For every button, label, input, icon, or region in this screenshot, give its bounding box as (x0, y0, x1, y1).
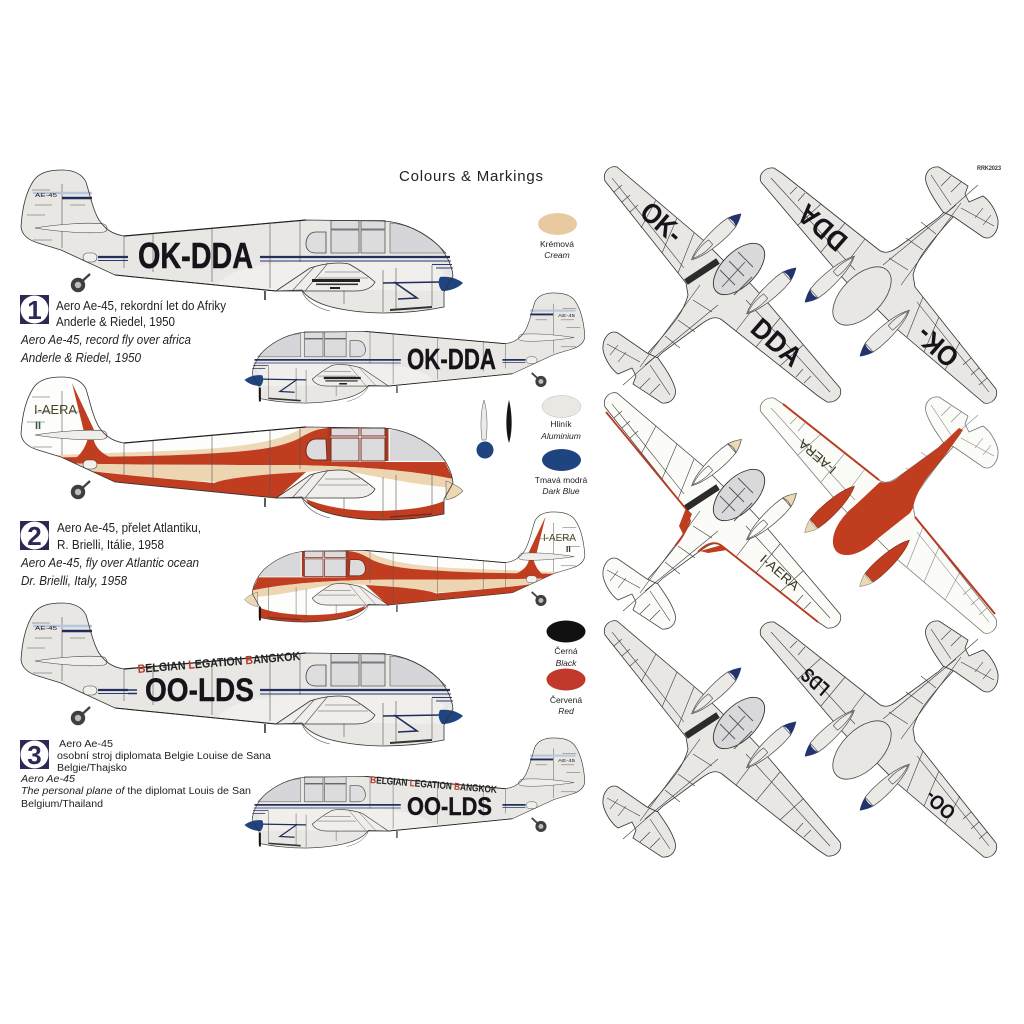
swatch: aluminium (540, 396, 581, 441)
title: Colours & Markings (399, 168, 543, 185)
swatch: cream (538, 213, 577, 260)
caption: scheme 3: Aero Ae-45 (59, 739, 113, 750)
badge 3 (20, 740, 49, 770)
caption: scheme 2: R. Brielli, Itálie, 1958 (57, 538, 164, 552)
caption: scheme 1: Aero Ae-45, record fly over africa (20, 333, 191, 347)
top view: scheme 1 upper surface (603, 167, 841, 403)
caption: scheme 2: Aero Ae-45, přelet Atlantiku, (57, 521, 201, 535)
side view: scheme 1 right profile: OK-DDA (407, 344, 496, 376)
top view: scheme 1 upper surface: DDA (745, 312, 808, 373)
top view: scheme 3 under surface (760, 621, 998, 857)
side view: scheme 2 right profile: II (566, 544, 571, 554)
side view: scheme 3 left profile: AE-45 (35, 626, 57, 632)
caption: scheme 2 (20, 521, 201, 588)
side view: scheme 3 right profile: AE-45 (558, 758, 576, 763)
caption: scheme 3: Aero Ae-45 (20, 774, 75, 785)
side view: scheme 3 right profile: OO-LDS (407, 793, 492, 821)
top view: scheme 2 under surface: I-AERA (795, 436, 839, 477)
badge 2 (20, 521, 49, 551)
copyright mark: RRK2023 (977, 166, 1002, 172)
icon: propeller dark (506, 400, 512, 443)
caption: scheme 3: Belgium/Thailand (21, 799, 103, 810)
swatch: dark blue: Tmavá modrá (535, 475, 587, 485)
swatch: red: Červená (550, 695, 582, 705)
swatch: cream: Cream (544, 250, 570, 260)
swatch: cream: Krémová (540, 239, 574, 249)
top view: scheme 1 under surface: OK- (910, 320, 965, 373)
swatch: aluminium: Aluminium (540, 431, 581, 441)
caption: scheme 3: Belgie/Thajsko (57, 763, 127, 774)
side view: scheme 3 left profile (21, 603, 463, 746)
swatch: red: Red (558, 706, 574, 716)
swatch: red (546, 668, 586, 716)
caption: scheme 3: The personal plane of the diplomat Louis de San (21, 786, 251, 797)
swatch: black: Black (556, 658, 577, 668)
badge 1 (20, 295, 49, 325)
caption: scheme 1: Anderle & Riedel, 1950 (56, 315, 175, 329)
caption: scheme 1: Aero Ae-45, rekordní let do Afriky (56, 299, 227, 313)
side view: scheme 2 right profile: I-AERA (543, 532, 576, 544)
side view: scheme 1 left profile: AE-45 (35, 193, 57, 199)
swatch: black: Černá (554, 646, 578, 656)
top view: scheme 2 upper surface: I-AERA (757, 551, 803, 594)
swatch: aluminium: Hliník (550, 419, 572, 429)
side view: scheme 3 right profile: BELGIAN LEGATION BANGKOK (370, 775, 498, 796)
top view: scheme 3 under surface: OO- (921, 785, 960, 823)
swatch: black (546, 620, 586, 668)
caption: scheme 2: Dr. Brielli, Italy, 1958 (21, 574, 127, 588)
side view: scheme 1 left profile (21, 170, 463, 313)
side view: scheme 1 right profile: AE-45 (558, 313, 576, 318)
top view: scheme 1 under surface: DDA (791, 198, 853, 257)
top view: scheme 3 upper surface (603, 621, 841, 857)
side view: scheme 2 right profile (244, 512, 585, 623)
side view: scheme 1 left profile: OK-DDA (138, 235, 253, 276)
side view: scheme 3 left profile: BELGIAN LEGATION BANGKOK (137, 649, 301, 676)
badge 2: 2 (27, 521, 42, 551)
caption: scheme 1: Anderle & Riedel, 1950 (20, 351, 141, 365)
caption: scheme 3 (20, 739, 271, 810)
side view: scheme 2 left profile (21, 377, 463, 521)
top view: scheme 2 under surface (760, 397, 998, 633)
top view: scheme 3 under surface: LDS (797, 663, 834, 699)
badge 1: 1 (27, 295, 42, 325)
caption: scheme 3: osobní stroj diplomata Belgie Louise de Sana (57, 751, 271, 762)
badge 3: 3 (27, 740, 42, 770)
icon: propeller light (476, 400, 494, 458)
top view: scheme 1 upper surface: OK- (634, 196, 689, 249)
caption: scheme 1 (20, 295, 227, 365)
side view: scheme 2 left profile: I-AERA (34, 402, 77, 417)
side view: scheme 1 right profile (244, 293, 585, 403)
top view: scheme 2 upper surface (603, 393, 841, 629)
swatch: dark blue (535, 449, 587, 496)
side view: scheme 3 left profile: OO-LDS (145, 672, 254, 708)
side view: scheme 3 right profile (244, 738, 585, 848)
caption: scheme 2: Aero Ae-45, fly over Atlantic ocean (20, 556, 199, 570)
side view: scheme 2 left profile: II (35, 420, 41, 432)
top view: scheme 1 under surface (760, 167, 998, 403)
swatch: dark blue: Dark Blue (542, 486, 580, 496)
